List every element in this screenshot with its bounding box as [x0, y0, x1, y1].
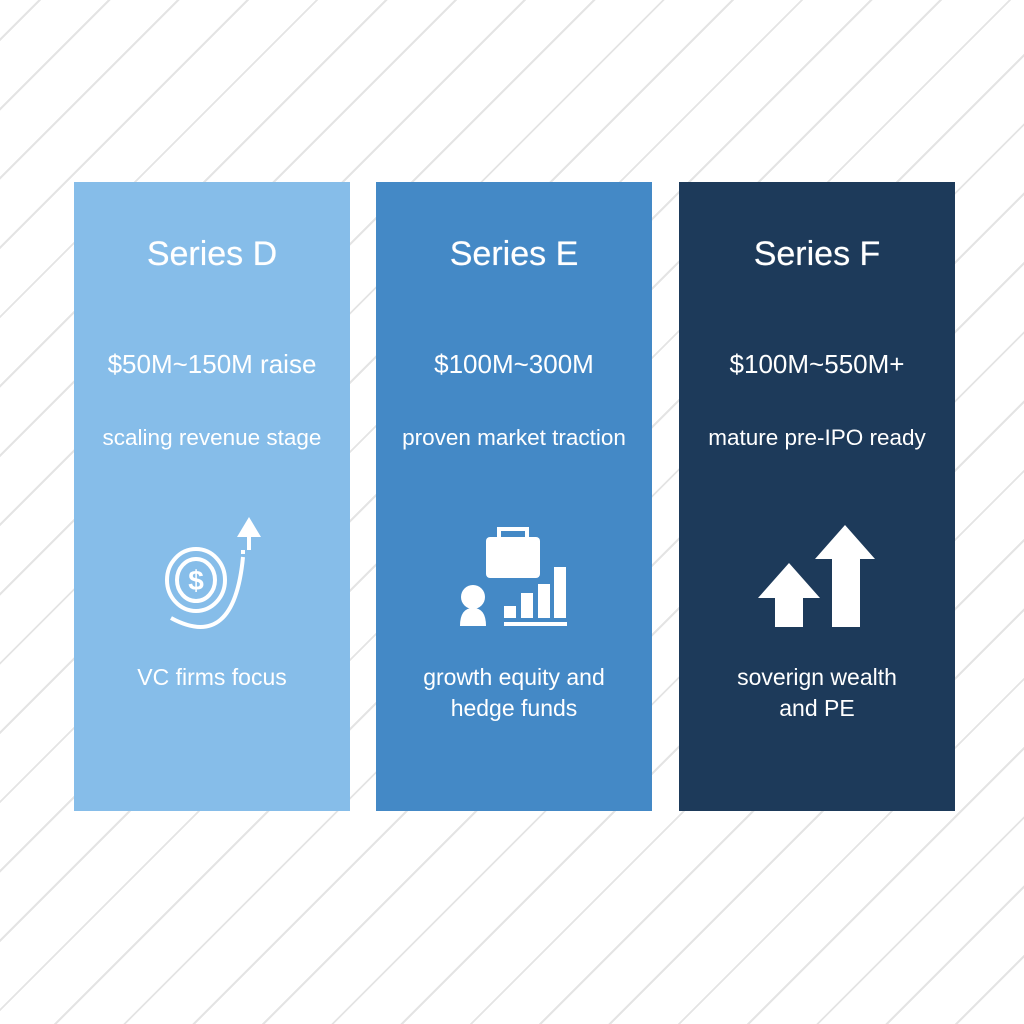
investors F: soverign wealth — [737, 664, 897, 690]
investors D: VC firms focus — [137, 664, 287, 690]
amount F: $100M~550M+ — [730, 349, 904, 379]
icon: dollar growth — [165, 517, 261, 629]
investors E — [423, 664, 605, 721]
panel: Series E — [376, 182, 652, 811]
stage F: mature pre-IPO ready — [708, 425, 926, 450]
amount E: $100M~300M — [434, 349, 594, 379]
heading D: Series D — [147, 235, 277, 273]
icon: up arrows — [758, 525, 875, 627]
icon: briefcase person chart — [460, 527, 567, 626]
icon: dollar growth: $ — [188, 565, 204, 596]
heading E: Series E — [450, 235, 578, 273]
heading F: Series F — [754, 235, 880, 273]
investors E: growth equity and — [423, 664, 605, 690]
stage E: proven market traction — [402, 425, 626, 450]
panel: Series F — [679, 182, 955, 811]
panel: Series D — [74, 182, 350, 811]
investors F — [737, 664, 897, 721]
investors E: hedge funds — [451, 695, 577, 721]
amount D: $50M~150M raise — [108, 349, 316, 379]
investors F: and PE — [779, 695, 855, 721]
stage D: scaling revenue stage — [103, 425, 321, 450]
